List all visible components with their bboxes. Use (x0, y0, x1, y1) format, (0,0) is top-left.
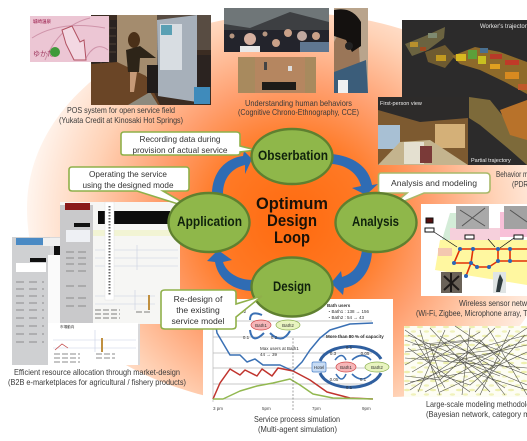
caption: POS: POS system for open service field (67, 105, 175, 115)
flow diagram large: Bath1 (340, 365, 352, 370)
network graph (405, 326, 527, 395)
lower chart sheet: 市場動向 (60, 324, 75, 329)
callout: re-design: service model (171, 316, 225, 326)
chart axis labels: 3 pm (213, 406, 223, 411)
flow diagram large: 0.1 (346, 345, 353, 350)
title: Optimum Design Loop: Design (267, 211, 317, 230)
panel: wireless sensor network (416, 204, 527, 318)
flow diagram large: Hotel (314, 365, 324, 370)
node: Application (168, 193, 250, 252)
flow diagram small: 0.2 (240, 309, 247, 314)
callout: operating the service (69, 167, 194, 209)
flow diagram small (240, 309, 300, 340)
caption: simulation: (Multi-agent simulation) (258, 424, 337, 434)
head sensor photo (334, 8, 368, 93)
callout: re-design: the existing (176, 305, 220, 315)
flow diagram large: Bath2 (371, 365, 383, 370)
node: Design (252, 258, 332, 316)
crowd photo (224, 8, 329, 52)
callout: analysis and modeling (378, 173, 490, 207)
flow diagram small: 0.2 (271, 335, 278, 340)
floor plan (435, 212, 527, 285)
flow diagram large: 0.1 (346, 385, 353, 390)
node: Application: Application (177, 213, 242, 229)
annotations: More than 80 % of capacity (326, 334, 384, 339)
panel: service process simulation (203, 299, 393, 434)
panel: behavior measurement PDR (378, 20, 527, 189)
callout: re-design: Re-design of (174, 294, 223, 304)
flow diagram large: 0.3 (330, 351, 337, 356)
line chart (213, 320, 373, 410)
flow diagram small: Bath1 (255, 323, 267, 328)
annotations: Bath users (327, 303, 351, 308)
first-person view: First-person view (380, 101, 422, 107)
node: Design: Design (273, 278, 311, 294)
front screenshot (60, 202, 180, 324)
panel: human behaviors (224, 8, 368, 117)
annotations: ・Bath1 : 138 → 156 (327, 309, 370, 314)
flow diagram large: 0.05 (330, 377, 339, 382)
trajectory map (402, 20, 527, 165)
flow diagram large (312, 345, 389, 390)
body sensor photo (238, 57, 316, 93)
annotations: 44 → 39 (260, 352, 278, 357)
chart axis labels: 5pm (262, 406, 271, 411)
sensor tags (425, 218, 523, 248)
flow diagram large: 0.1 (360, 377, 367, 382)
title: Optimum Design Loop: Optimum (256, 194, 328, 213)
callout: analysis and modeling: Analysis and modeling (391, 178, 477, 188)
caption: market design: (B2B e-marketplaces for agricultural / fishery products) (8, 377, 186, 387)
title: Optimum Design Loop: Loop (274, 228, 310, 247)
lower chart sheet (48, 323, 138, 365)
node: Analysis: Analysis (352, 213, 399, 229)
panel: large-scale modeling (404, 326, 527, 419)
caption: POS: (Yukata Credit at Kinosaki Hot Springs) (59, 115, 183, 125)
callout: re-design (161, 290, 262, 329)
callout: recording data: provision of actual service (132, 145, 228, 155)
caption: behaviors: (Cognitive Chrono-Ethnography, CCE) (238, 107, 359, 117)
chart axis labels: 9pm (362, 406, 371, 411)
first-person view (378, 97, 468, 165)
caption: market design: Efficient resource allocation through market-design (14, 367, 180, 377)
callout: recording data (121, 132, 256, 155)
grid lines (213, 300, 372, 402)
node: Observation: Obserbation (258, 147, 328, 163)
callout: operating the service: using the designed mode (82, 180, 174, 190)
node: Analysis (336, 193, 416, 252)
flow diagram large: 0.05 (361, 351, 370, 356)
pink card: 城崎温泉 (33, 18, 51, 25)
flow diagram small: 0.1 (243, 335, 250, 340)
POS photo (91, 15, 211, 105)
flow diagram small: Bath2 (282, 323, 294, 328)
arrow: analysis to design (331, 250, 372, 295)
node: Observation (252, 129, 332, 184)
chart axis labels: 7pm (312, 406, 321, 411)
panel: market design screenshots (8, 202, 186, 387)
mid sheet (48, 255, 62, 325)
caption: simulation: Service process simulation (254, 414, 340, 424)
pink card (30, 16, 109, 62)
pink card: ゆかた (33, 50, 54, 58)
caption: behaviors: Understanding human behaviors (245, 98, 352, 108)
arrow: application to observation (212, 151, 252, 194)
callout: operating the service: Operating the service (89, 169, 167, 179)
arrow: design to application (207, 250, 253, 291)
network lines and nodes (452, 247, 527, 278)
panel: POS system (30, 15, 211, 125)
annotations: ・Bath2 : 54 → 43 (327, 315, 365, 320)
partial trajectory: Partial trajectory (471, 158, 511, 164)
partial trajectory (469, 97, 527, 165)
arrow: observation to analysis (332, 154, 378, 195)
annotations: Max users at Bath1 (260, 346, 299, 351)
sensor photos (441, 206, 527, 293)
back screenshot (12, 237, 140, 365)
loop arrows (207, 151, 378, 295)
callout: recording data: Recording data during (140, 134, 221, 144)
